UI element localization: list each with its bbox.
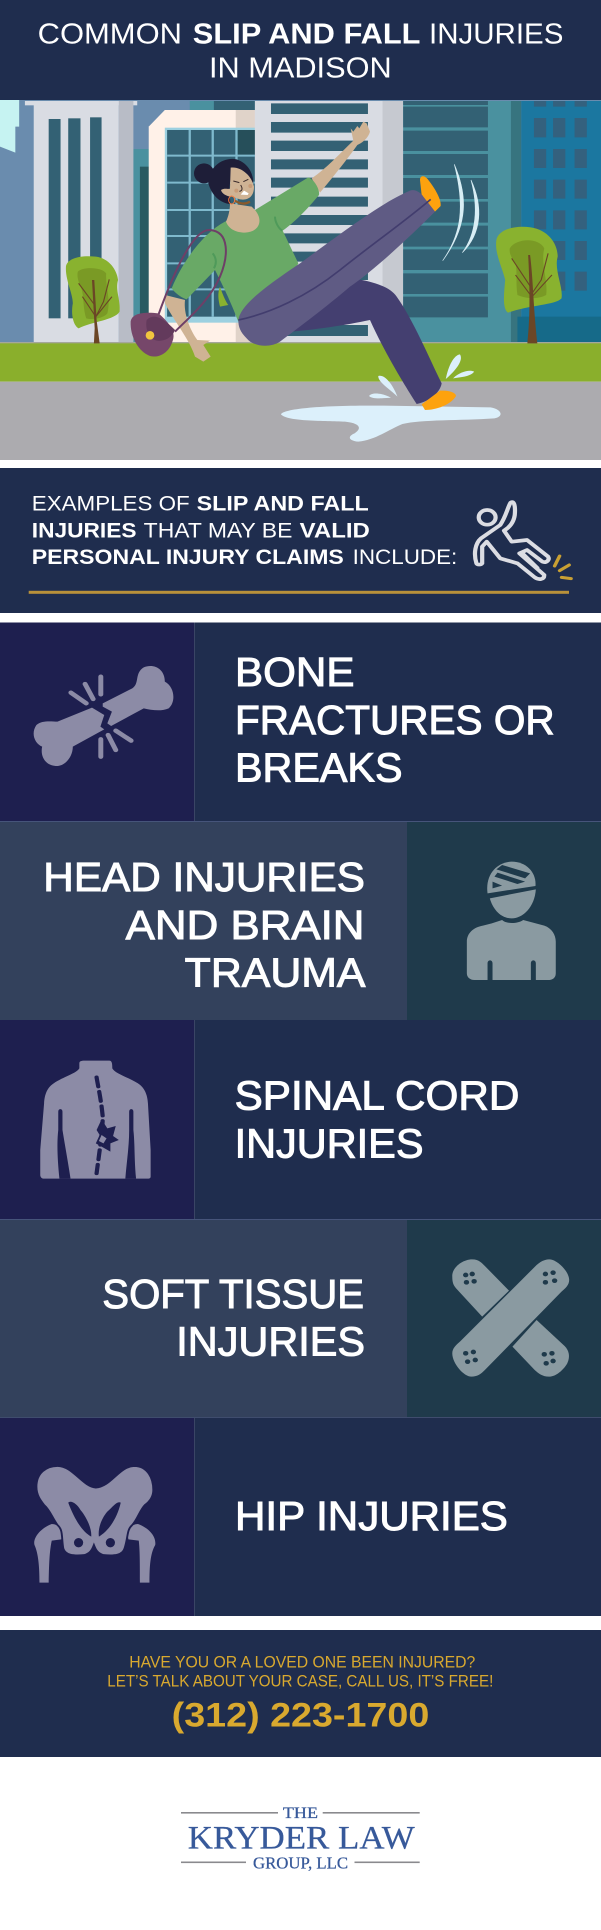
intro text: PERSONAL INJURY CLAIMS xyxy=(32,545,344,569)
row: bone fractures xyxy=(0,622,601,821)
intro text: SLIP AND FALL xyxy=(197,492,369,516)
header panel xyxy=(0,0,601,100)
label xyxy=(235,1072,519,1167)
call to action text: HAVE YOU OR A LOVED ONE BEEN INJURED? xyxy=(129,1653,475,1671)
intro text: INCLUDE: xyxy=(353,545,457,569)
call to action text xyxy=(107,1653,493,1691)
intro text: EXAMPLES OF xyxy=(32,492,190,516)
label: AND BRAIN xyxy=(126,902,364,948)
label xyxy=(102,1271,365,1365)
logo xyxy=(181,1805,420,1872)
phone number: (312) 223-1700 xyxy=(172,1697,429,1735)
label xyxy=(235,649,555,791)
intro text: VALID xyxy=(300,519,370,543)
title xyxy=(38,18,563,85)
label: BREAKS xyxy=(235,745,402,791)
label: BONE xyxy=(235,649,354,695)
label: FRACTURES OR xyxy=(235,697,555,743)
intro text xyxy=(32,492,457,569)
grass and pavement xyxy=(0,342,601,460)
row: spinal cord xyxy=(0,1020,601,1219)
title: COMMON xyxy=(38,18,182,50)
logo: KRYDER LAW xyxy=(188,1820,416,1856)
icon: crossed bandages xyxy=(452,1259,569,1377)
city background xyxy=(0,100,601,343)
row: head injuries xyxy=(0,821,601,1020)
gold divider xyxy=(29,591,569,594)
label: INJURIES xyxy=(235,1121,424,1167)
intro panel xyxy=(0,468,601,613)
label: HEAD INJURIES xyxy=(43,854,365,900)
logo: GROUP, LLC xyxy=(253,1853,348,1872)
puddle and splashes xyxy=(281,354,501,442)
title: INJURIES xyxy=(429,18,563,50)
icon: bandaged head xyxy=(467,862,556,980)
call to action text: LET’S TALK ABOUT YOUR CASE, CALL US, IT’S FREE! xyxy=(107,1673,493,1691)
woman figure xyxy=(131,122,479,410)
intro text: INJURIES xyxy=(32,519,136,543)
intro text: THAT MAY BE xyxy=(144,519,292,543)
label: SPINAL CORD xyxy=(235,1072,519,1118)
call to action panel xyxy=(0,1630,601,1757)
icon: back with spine injury xyxy=(40,1061,151,1179)
right tree xyxy=(496,227,562,343)
icon: broken bone xyxy=(34,666,173,766)
icon: person slipping xyxy=(475,502,571,579)
title: SLIP AND FALL xyxy=(193,18,420,50)
icon: pelvis xyxy=(34,1466,155,1583)
label: INJURIES xyxy=(176,1319,365,1365)
label: SOFT TISSUE xyxy=(102,1271,364,1317)
title: IN MADISON xyxy=(209,53,392,85)
logo: THE xyxy=(283,1805,318,1822)
illustration: woman slipping on a puddle in a city xyxy=(0,100,601,460)
row: hip injuries xyxy=(0,1417,601,1616)
left tree xyxy=(66,256,120,343)
label xyxy=(43,854,366,996)
label: HIP INJURIES xyxy=(235,1493,508,1539)
row: soft tissue xyxy=(0,1219,601,1417)
label: TRAUMA xyxy=(185,950,366,996)
